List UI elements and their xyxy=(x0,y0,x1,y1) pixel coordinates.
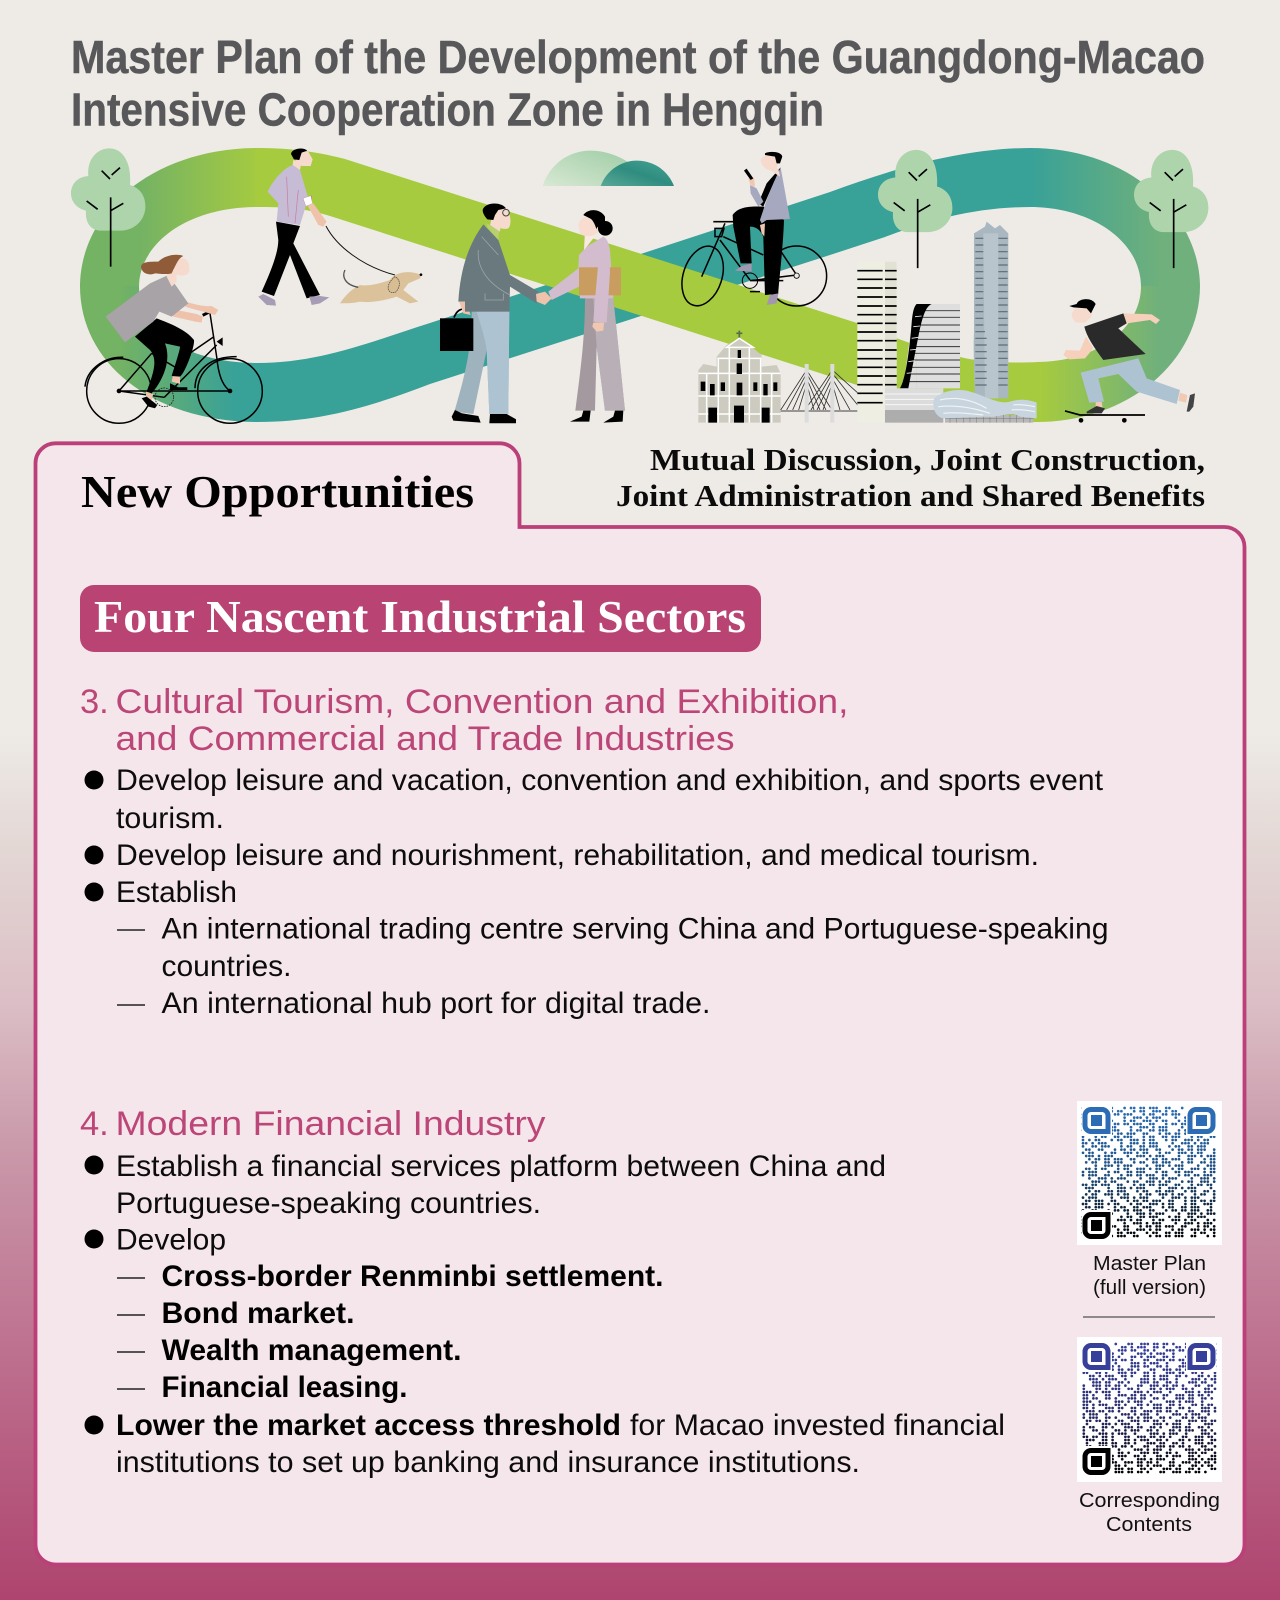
section 4 list: Develop xyxy=(116,1224,226,1256)
illustration: twisted low building xyxy=(933,390,1037,423)
QR code: master plan xyxy=(1077,1101,1222,1245)
section 4 heading: 4. xyxy=(80,1105,109,1143)
icon: tree right xyxy=(1134,150,1208,268)
section 3 list: Develop leisure and nourishment, rehabilitation, and medical tourism. xyxy=(116,839,1039,872)
panel: new opportunities xyxy=(36,443,1244,1565)
section 4 list: Portuguese-speaking countries. xyxy=(116,1187,541,1220)
banner: four nascent industrial sectors: Four Nascent Industrial Sectors xyxy=(94,591,746,642)
section 3 heading: Cultural Tourism, Convention and Exhibition, xyxy=(116,683,848,721)
illustration: man on bicycle with phone xyxy=(675,152,827,311)
illustration: infinity ribbon xyxy=(80,148,1200,422)
caption: corresponding contents xyxy=(1079,1490,1220,1536)
icon: tree middle xyxy=(878,150,952,268)
section 3 list: Develop leisure and vacation, convention and exhibition, and sports event xyxy=(116,764,1103,797)
caption: corresponding contents: Corresponding xyxy=(1079,1490,1220,1512)
tagline: Mutual Discussion, Joint Construction, xyxy=(650,442,1205,477)
illustration: cable-stayed bridge xyxy=(781,364,885,423)
section 4 list: Wealth management. xyxy=(162,1334,462,1367)
section 3 list: Establish xyxy=(116,876,237,909)
section 4 list: Financial leasing. xyxy=(162,1371,408,1404)
illustration: curved striped building xyxy=(885,304,960,423)
caption: master plan: (full version) xyxy=(1093,1277,1206,1299)
section 3 heading xyxy=(80,683,848,758)
caption: master plan xyxy=(1093,1253,1206,1299)
section 3 list: countries. xyxy=(162,950,292,983)
section 3 heading: and Commercial and Trade Industries xyxy=(116,720,734,758)
section 3 list: tourism. xyxy=(116,802,224,835)
illustration: tall grey tower xyxy=(974,222,1008,398)
caption: master plan: Master Plan xyxy=(1093,1253,1206,1275)
tab heading: New Opportunities xyxy=(81,466,474,517)
illustration: striped tower xyxy=(857,262,897,423)
section 3 list xyxy=(84,764,1108,1020)
illustration: businessman xyxy=(440,204,538,423)
section 4 list: for Macao invested financial xyxy=(630,1409,1005,1442)
tagline: Joint Administration and Shared Benefits xyxy=(616,478,1205,513)
section 4 list: Bond market. xyxy=(162,1297,354,1330)
illustration: skateboarder xyxy=(1063,299,1195,423)
illustration: Ruins of St Paul's xyxy=(698,331,781,423)
title: Intensive Cooperation Zone in Hengqin xyxy=(71,84,824,136)
section 4 list: institutions to set up banking and insurance institutions. xyxy=(116,1446,860,1479)
tagline xyxy=(616,442,1205,513)
section 3 list: An international hub port for digital trade. xyxy=(162,987,710,1020)
icon: tree left xyxy=(71,148,145,267)
icon: hills xyxy=(543,151,674,186)
section 4 heading: Modern Financial Industry xyxy=(116,1105,546,1143)
section 4 list: Cross-border Renminbi settlement. xyxy=(162,1260,664,1293)
section 3 list: An international trading centre serving China and Portuguese-speaking xyxy=(162,912,1108,946)
caption: corresponding contents: Contents xyxy=(1106,1514,1192,1536)
illustration: man walking dog xyxy=(258,148,422,306)
section 4 list: Establish a financial services platform between China and xyxy=(116,1150,886,1183)
title xyxy=(71,31,1205,136)
section 3 heading: 3. xyxy=(80,683,109,721)
section 4 list: Lower the market access threshold xyxy=(116,1409,621,1442)
illustration: businesswoman xyxy=(536,210,625,423)
section 4 list xyxy=(84,1150,1005,1479)
illustration: woman cycling xyxy=(85,255,262,423)
QR code: corresponding contents xyxy=(1077,1337,1222,1482)
